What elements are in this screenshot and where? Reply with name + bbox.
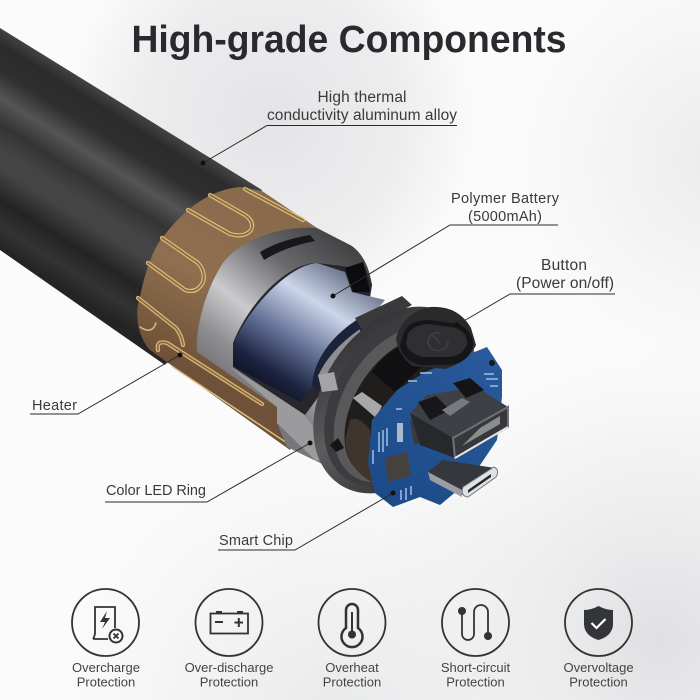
lower gray band — [230, 367, 330, 462]
battery notch — [345, 262, 370, 292]
brown heater sleeve — [137, 187, 330, 450]
protection: overheat — [318, 589, 386, 690]
callout: button: Button — [541, 257, 587, 274]
board mounting hole — [489, 360, 495, 366]
callout: aluminum alloy: conductivity aluminum alloy — [267, 107, 457, 124]
callout: color LED ring: Color LED Ring — [106, 483, 206, 499]
callout: color LED ring — [105, 440, 312, 502]
title: High-grade Components — [132, 19, 566, 61]
protection: over-discharge: Protection — [200, 674, 258, 690]
protection: overheat: Overheat — [325, 660, 379, 675]
product: exploded view of tube — [0, 28, 510, 524]
power button — [400, 320, 473, 365]
protection: overheat: Protection — [323, 674, 381, 690]
callout: polymer battery: (5000mAh) — [468, 209, 542, 225]
protection: over-discharge: Over-discharge — [185, 660, 273, 675]
battery cylinder — [233, 263, 385, 402]
protection: short-circuit: Short-circuit — [441, 660, 511, 675]
protection: over-discharge — [185, 589, 273, 690]
end cap outer ring — [280, 276, 510, 524]
callout: polymer battery — [330, 191, 560, 298]
callout: aluminum alloy: High thermal — [318, 89, 406, 106]
protection: overcharge: Overcharge — [72, 660, 140, 675]
gold heater wire — [138, 189, 303, 443]
callout: button — [454, 257, 615, 328]
protection: overcharge: Protection — [77, 674, 135, 690]
interior rods — [318, 345, 420, 482]
protection: short-circuit: Protection — [446, 674, 505, 690]
callout: polymer battery: Polymer Battery — [451, 191, 560, 207]
navy battery end — [312, 300, 420, 410]
button halo — [396, 307, 476, 369]
callout: heater: Heater — [32, 398, 77, 414]
black aluminum tube — [0, 28, 262, 365]
light tab band — [322, 333, 362, 378]
USB-A port — [410, 378, 508, 458]
board chips — [385, 418, 425, 482]
protection: overvoltage — [563, 589, 634, 690]
protection: short-circuit — [441, 589, 511, 690]
USB-C port — [428, 460, 498, 497]
protection: overvoltage: Protection — [569, 674, 628, 690]
end cap ridge — [294, 291, 500, 513]
callout: smart chip: Smart Chip — [219, 533, 293, 549]
top tab — [355, 296, 412, 330]
callout: button: (Power on/off) — [516, 275, 614, 292]
protection: overcharge — [72, 589, 140, 690]
circuit board — [368, 347, 502, 507]
callout: heater — [30, 352, 182, 414]
ring slot — [260, 235, 315, 260]
callout: aluminum alloy — [200, 89, 457, 166]
board speckle — [372, 372, 498, 500]
protection: overvoltage: Overvoltage — [563, 660, 634, 675]
callout: smart chip — [218, 490, 396, 550]
gray inner ring — [197, 228, 372, 475]
hollow interior — [233, 262, 372, 415]
